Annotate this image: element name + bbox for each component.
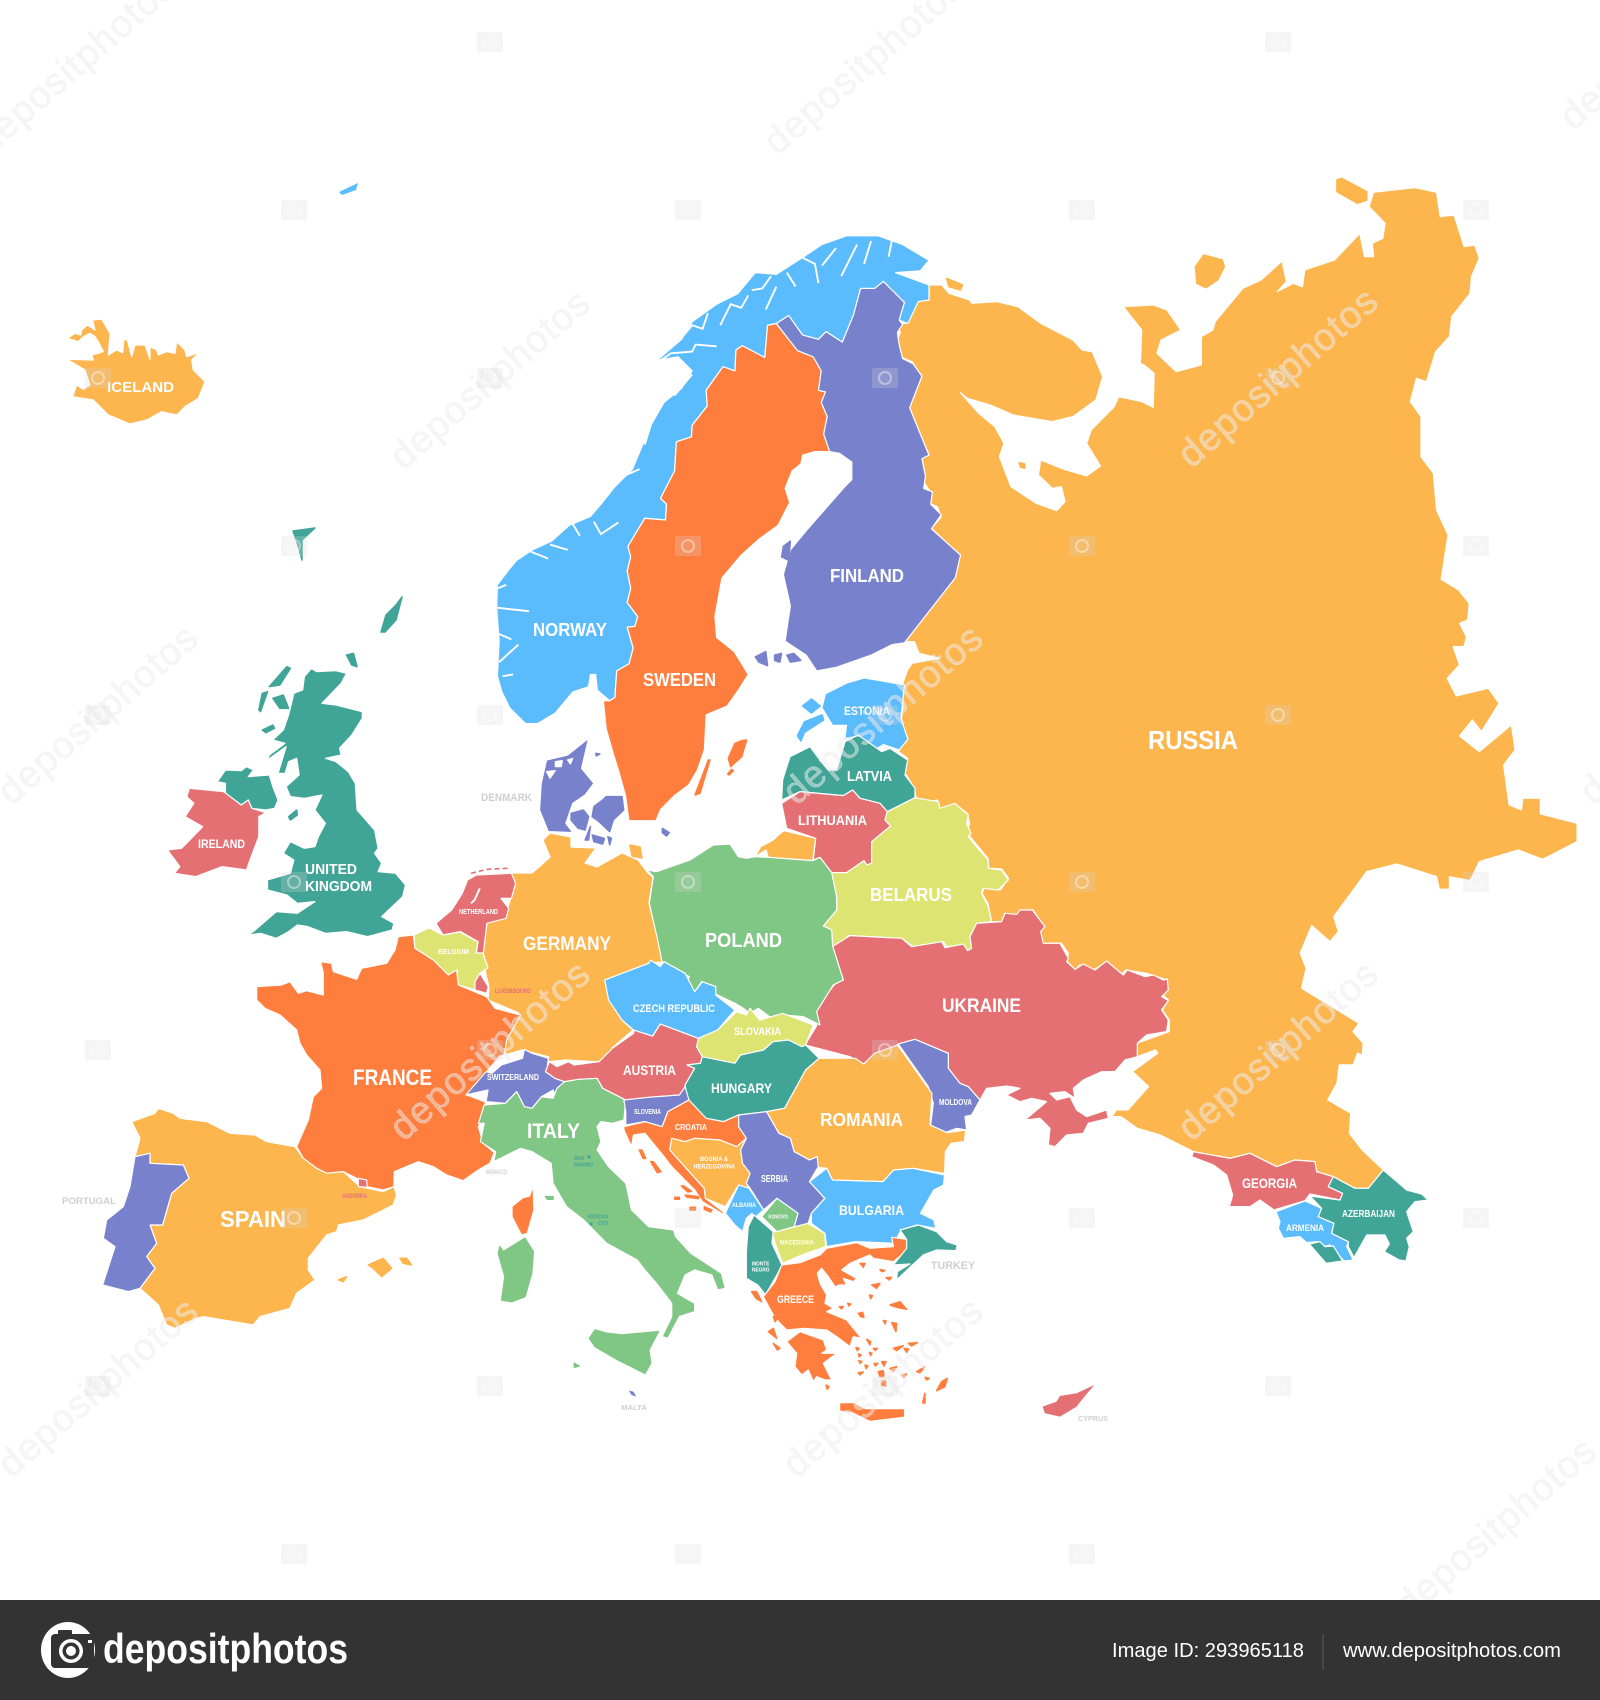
watermark: diagonal logos: depositphotos bbox=[775, 617, 991, 813]
lake holes in Jutland bbox=[547, 758, 573, 778]
label: Netherlands: NETHERLAND bbox=[459, 909, 498, 916]
country: Belgium bbox=[414, 928, 488, 990]
label: Poland: POLAND bbox=[705, 930, 782, 952]
island: Sicily, Sardinia, Elba bbox=[498, 1197, 658, 1373]
watermark: diagonal logos: depositphotos bbox=[382, 953, 598, 1149]
label: San Marino bbox=[574, 1155, 593, 1168]
label: Montenegro bbox=[752, 1262, 770, 1274]
label: Greece: GREECE bbox=[777, 1294, 814, 1306]
country: Iceland bbox=[67, 319, 205, 424]
watermark: camera icons bbox=[85, 32, 1489, 1564]
country: Ukraine bbox=[805, 910, 1168, 1147]
label: Kosovo: KOSOVO bbox=[768, 1214, 789, 1220]
image ID: Image ID: 293965118 bbox=[1112, 1640, 1304, 1662]
country: Belarus bbox=[823, 798, 1008, 952]
country: Russia bbox=[896, 178, 1577, 1188]
label: Ukraine: UKRAINE bbox=[942, 996, 1021, 1017]
label: San Marino: MARINO bbox=[574, 1162, 593, 1168]
country: Hungary bbox=[685, 1040, 819, 1122]
country: Andorra bbox=[342, 1178, 368, 1200]
label: Estonia: ESTONIA bbox=[844, 704, 890, 718]
label: San Marino: SAN bbox=[574, 1156, 584, 1162]
watermark: diagonal logos: depositphotos bbox=[775, 1290, 991, 1486]
country: Italy bbox=[478, 1078, 725, 1373]
country: Denmark bbox=[481, 738, 669, 845]
country: Bosnia and Herzegovina bbox=[670, 1138, 750, 1207]
country: Estonia bbox=[797, 678, 908, 750]
label: Monaco: MONACO bbox=[486, 1170, 507, 1176]
country: France bbox=[257, 935, 533, 1234]
country: Lithuania bbox=[782, 790, 891, 873]
label: Belgium: BELGIUM bbox=[438, 949, 469, 956]
country: Greece bbox=[752, 1237, 947, 1420]
territory: small north Atlantic islet bbox=[339, 183, 358, 195]
label: United Kingdom: KINGDOM bbox=[305, 878, 372, 895]
island: Estonian islands bbox=[797, 699, 824, 741]
country: Romania bbox=[767, 1045, 966, 1182]
island: Corsica bbox=[513, 1189, 533, 1234]
label: Hungary: HUNGARY bbox=[711, 1080, 773, 1096]
country: Ireland bbox=[168, 788, 266, 877]
country: Croatia bbox=[624, 1100, 746, 1213]
website URL: www.depositphotos.com bbox=[1342, 1640, 1561, 1662]
label: Romania: ROMANIA bbox=[820, 1110, 903, 1130]
map of Europe bbox=[62, 178, 1577, 1423]
label: United Kingdom: UNITED bbox=[305, 861, 357, 878]
country: Slovenia bbox=[624, 1087, 689, 1127]
label: Bosnia and Herzegovina: BOSNIA & bbox=[700, 1157, 729, 1163]
label: Norway: NORWAY bbox=[533, 620, 607, 640]
country: Macedonia bbox=[772, 1223, 826, 1263]
country: Germany bbox=[483, 833, 662, 1062]
label: Iceland: ICELAND bbox=[107, 379, 174, 396]
country: Czech Republic bbox=[605, 960, 735, 1038]
watermark: diagonal logos: depositphotos bbox=[1170, 280, 1386, 476]
label: Bosnia and Herzegovina bbox=[694, 1157, 736, 1170]
label: Georgia: GEORGIA bbox=[1242, 1175, 1297, 1191]
label: Sweden: SWEDEN bbox=[643, 670, 716, 690]
label: Vatican City: VATICAN bbox=[588, 1214, 609, 1220]
label: Bulgaria: BULGARIA bbox=[839, 1202, 904, 1218]
country: Spain bbox=[132, 1108, 412, 1328]
island: Danish islands bbox=[571, 753, 669, 845]
label: Turkey: TURKEY bbox=[931, 1260, 976, 1272]
label: Vatican City: CITY bbox=[598, 1221, 609, 1227]
label: Ireland: IRELAND bbox=[198, 837, 245, 851]
watermark: diagonal logos: depositphotos bbox=[1170, 953, 1386, 1149]
label: Armenia: ARMENIA bbox=[1286, 1223, 1324, 1233]
label: Austria: AUSTRIA bbox=[623, 1062, 676, 1078]
label: Russia: RUSSIA bbox=[1148, 725, 1238, 755]
island: Kolguev and northern islands bbox=[947, 178, 1367, 468]
country: Slovakia bbox=[697, 1008, 813, 1063]
country: Moldova bbox=[898, 1039, 980, 1133]
country: Montenegro bbox=[746, 1215, 782, 1295]
country: Turkey (European part) bbox=[893, 1225, 976, 1280]
label: Latvia: LATVIA bbox=[847, 768, 892, 785]
label: Moldova: MOLDOVA bbox=[939, 1098, 972, 1107]
label: Andorra: ANDORRA bbox=[342, 1194, 368, 1200]
label: Portugal: PORTUGAL bbox=[62, 1196, 117, 1206]
country: Austria bbox=[545, 1024, 702, 1100]
country: Cyprus bbox=[1043, 1385, 1108, 1423]
country: Portugal bbox=[62, 1153, 189, 1292]
label: Czech Republic: CZECH REPUBLIC bbox=[633, 1003, 715, 1015]
label: Belarus: BELARUS bbox=[870, 885, 952, 905]
territory: Kaliningrad bbox=[755, 831, 816, 861]
watermark: diagonal logos: depositphotos bbox=[1388, 1430, 1600, 1626]
country: Georgia bbox=[1192, 1152, 1343, 1210]
watermark: diagonal logos: depositphotos bbox=[382, 282, 598, 478]
label: Slovakia: SLOVAKIA bbox=[734, 1026, 781, 1038]
label: Switzerland: SWITZERLAND bbox=[487, 1072, 539, 1082]
island: Gotland and Oland bbox=[695, 740, 747, 795]
island: Balearic Islands bbox=[338, 1258, 412, 1282]
country: Albania bbox=[725, 1185, 764, 1232]
country: Azerbaijan bbox=[1309, 1170, 1428, 1263]
mainland: Peloponnese bbox=[787, 1332, 837, 1382]
territory: Nakhchivan bbox=[1309, 1242, 1343, 1263]
label: Macedonia: MACEDONIA bbox=[780, 1240, 815, 1246]
country: Luxembourg bbox=[475, 973, 531, 995]
country: Sweden bbox=[603, 324, 830, 821]
label: Cyprus: CYPRUS bbox=[1078, 1416, 1108, 1423]
country: Bulgaria bbox=[809, 1168, 945, 1247]
country: Kosovo bbox=[762, 1198, 798, 1232]
label: Montenegro: MONTE bbox=[752, 1262, 770, 1268]
label: Germany: GERMANY bbox=[523, 934, 611, 955]
island: Aland bbox=[755, 541, 801, 666]
country: Malta bbox=[621, 1391, 647, 1412]
label: Bosnia and Herzegovina: HERZEGOVINA bbox=[694, 1164, 736, 1170]
label: Luxembourg: LUXEMBOURG bbox=[495, 989, 531, 995]
label: Italy: ITALY bbox=[527, 1120, 580, 1143]
label: Lithuania: LITHUANIA bbox=[798, 812, 867, 828]
label: Finland: FINLAND bbox=[830, 566, 904, 586]
footer bar bbox=[0, 1600, 1600, 1700]
label: United Kingdom bbox=[305, 861, 372, 895]
label: Denmark: DENMARK bbox=[481, 792, 532, 804]
label: Malta: MALTA bbox=[621, 1405, 647, 1412]
label: Montenegro: NEGRO bbox=[752, 1268, 770, 1274]
country: Armenia bbox=[1276, 1201, 1353, 1261]
label: Serbia: SERBIA bbox=[761, 1174, 788, 1185]
label: Croatia: CROATIA bbox=[675, 1123, 707, 1132]
label: Albania: ALBANIA bbox=[732, 1203, 757, 1209]
island: Baltic German islands bbox=[630, 845, 642, 858]
country: Serbia bbox=[739, 1112, 825, 1227]
country: Switzerland bbox=[466, 1049, 565, 1108]
logo wordmark: depositphotos bbox=[103, 1625, 348, 1672]
country: Poland bbox=[647, 844, 843, 1025]
country: Netherlands bbox=[436, 868, 516, 953]
label: Azerbaijan: AZERBAIJAN bbox=[1342, 1209, 1395, 1220]
label: Slovenia: SLOVENIA bbox=[634, 1109, 661, 1116]
island: British islands bbox=[259, 528, 402, 820]
label: France: FRANCE bbox=[353, 1065, 432, 1090]
label: Spain: SPAIN bbox=[220, 1206, 286, 1232]
icon: depositphotos camera logo bbox=[41, 1622, 95, 1678]
country: Norway bbox=[497, 236, 929, 724]
island: Croatian islands bbox=[639, 1150, 712, 1212]
label: Vatican City bbox=[588, 1214, 609, 1227]
country: Finland bbox=[755, 281, 961, 671]
country: United Kingdom bbox=[217, 528, 405, 938]
island: Greek islands bbox=[752, 1263, 947, 1420]
country: Latvia bbox=[782, 735, 915, 812]
